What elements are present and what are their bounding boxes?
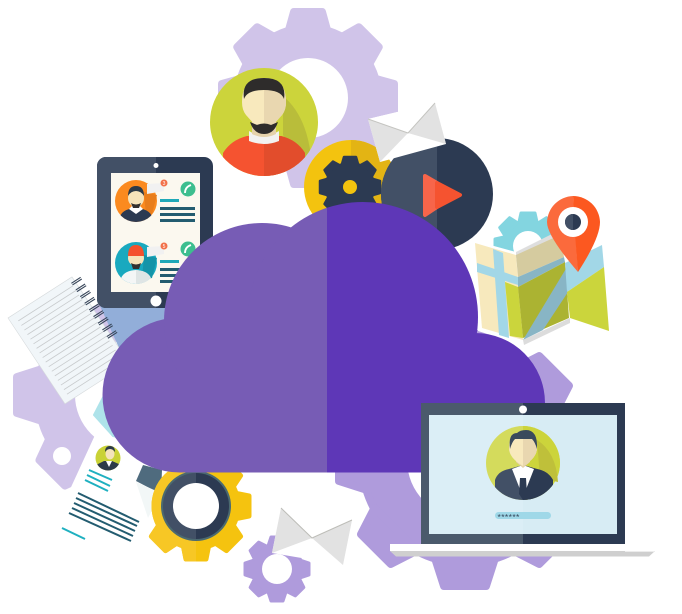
- laptop base: [390, 544, 655, 556]
- tablet text lines 2: [160, 260, 195, 283]
- envelope: bottom: [272, 508, 352, 565]
- play triangle: [425, 176, 460, 215]
- yellow circle with dark gear: [304, 140, 398, 234]
- password field: ******: [498, 512, 520, 522]
- laptop user avatar: [486, 426, 560, 500]
- document text lines: [62, 470, 139, 541]
- gear: yellow: [148, 472, 252, 562]
- map folded sheet: [472, 228, 612, 346]
- gear: small bottom purple: [245, 537, 309, 601]
- folded dark paper: [136, 465, 162, 518]
- document avatar: [96, 446, 121, 471]
- notebook spiral rings: [71, 277, 117, 338]
- map teal gear: [495, 213, 561, 271]
- teal and blue backing shape: [94, 296, 175, 440]
- tablet message badge 1: 3: [163, 181, 166, 187]
- dark gear: [320, 157, 380, 217]
- notebook: [8, 273, 135, 404]
- video play circle: [381, 138, 493, 250]
- tablet message badge 1: [147, 180, 168, 194]
- envelope: top: [368, 103, 446, 162]
- tablet: [97, 157, 213, 308]
- tablet phone icon 1: [180, 182, 196, 196]
- tablet message badge 2: 5: [163, 244, 166, 250]
- laptop: [390, 403, 655, 556]
- gear: large lower right: [339, 334, 591, 586]
- tablet contact 1 avatar: [115, 180, 157, 222]
- location pin: [547, 196, 600, 272]
- password field: [495, 512, 551, 522]
- map with gear and pin: [472, 196, 612, 346]
- tablet message badge 2: [147, 242, 168, 257]
- gear: top lilac: [222, 12, 394, 184]
- tablet contact 2 avatar: [115, 242, 157, 284]
- cloud left half: [102, 208, 327, 472]
- gear: left lilac: [17, 299, 222, 505]
- man avatar with red shirt: [210, 68, 318, 180]
- tablet phone icon 2: [180, 242, 196, 256]
- yellow gear lighter left half: [148, 472, 196, 562]
- central cloud: [102, 202, 545, 473]
- tablet text lines 1: [160, 199, 195, 222]
- notebook ruled lines: [18, 286, 122, 394]
- white document: [55, 435, 170, 555]
- cloud right half: [327, 202, 545, 472]
